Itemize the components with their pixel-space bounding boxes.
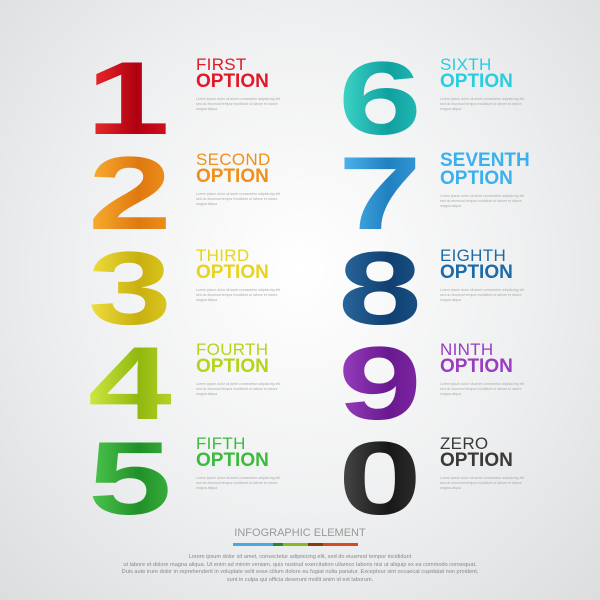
footer paragraph: sunt in culpa qui officia deserunt mollit anim id est laborum.	[227, 576, 373, 582]
digit 4: 4	[88, 326, 172, 442]
text: second option	[196, 150, 280, 206]
text: ninth option	[440, 340, 524, 396]
text: second option: OPTION	[196, 166, 269, 187]
text: seventh option: Lorem ipsum dolor sit amet consectetur adipisicing elit sed do eiusmod tempor incididunt ut labore et dolore magna aliqua	[440, 194, 524, 208]
text: first option: OPTION	[196, 71, 269, 92]
text: eighth option: Lorem ipsum dolor sit amet consectetur adipisicing elit sed do eiusmod tempor incididunt ut labore et dolore magna aliqua	[440, 288, 524, 302]
text: fourth option: OPTION	[196, 356, 269, 377]
text: fifth option: Lorem ipsum dolor sit amet consectetur adipisicing elit sed do eiusmod tempor incididunt ut labore et dolore magna aliqua	[196, 476, 280, 490]
text: fourth option: FOURTH	[196, 340, 268, 359]
digit 6: 6	[338, 41, 422, 157]
text: third option: OPTION	[196, 262, 269, 283]
footer paragraph	[122, 554, 478, 582]
text: seventh option: OPTION	[440, 168, 513, 189]
digit 8: 8	[338, 231, 422, 347]
text: second option: SECOND	[196, 150, 271, 169]
text: second option: Lorem ipsum dolor sit amet consectetur adipisicing elit sed do eiusmod tempor incididunt ut labore et dolore magna aliqua	[196, 192, 280, 206]
text: fifth option	[196, 434, 280, 490]
text: seventh option: SEVENTH	[440, 150, 530, 171]
text: first option: Lorem ipsum dolor sit amet consectetur adipisicing elit sed do eiusmod tempor incididunt ut labore et dolore magna aliqua	[196, 97, 280, 111]
text: fifth option: OPTION	[196, 450, 269, 471]
text: ninth option: NINTH	[440, 340, 493, 359]
text: seventh option	[440, 150, 530, 208]
text: first option: FIRST	[196, 55, 247, 74]
text: zero option: Lorem ipsum dolor sit amet consectetur adipisicing elit sed do eiusmod tempor incididunt ut labore et dolore magna aliqua	[440, 476, 524, 490]
text: sixth option	[440, 55, 524, 111]
footer paragraph: ut labore et dolore magna aliqua. Ut enim ad minim veniam, quis nostrud exercitation ullamco laboris nisi ut aliquip ex ea commodo consequat.	[123, 562, 477, 568]
text: ninth option: Lorem ipsum dolor sit amet consectetur adipisicing elit sed do eiusmod tempor incididunt ut labore et dolore magna aliqua	[440, 382, 524, 396]
text: eighth option: OPTION	[440, 262, 513, 283]
text: sixth option: SIXTH	[440, 55, 492, 74]
footer paragraph: Duis aute irure dolor in reprehenderit in voluptate velit esse cillum dolore eu fugiat nulla pariatur. Excepteur sint occaecat cupidatat non proident,	[122, 569, 478, 575]
text: fourth option: Lorem ipsum dolor sit amet consectetur adipisicing elit sed do eiusmod tempor incididunt ut labore et dolore magna aliqua	[196, 382, 280, 396]
digit 0: 0	[338, 421, 422, 537]
text: fourth option	[196, 340, 280, 396]
digit 3: 3	[88, 231, 172, 347]
text: ninth option: OPTION	[440, 356, 513, 377]
text: third option	[196, 246, 280, 302]
text: third option: THIRD	[196, 246, 249, 265]
text: eighth option	[440, 246, 524, 302]
text: third option: Lorem ipsum dolor sit amet consectetur adipisicing elit sed do eiusmod tempor incididunt ut labore et dolore magna aliqua	[196, 288, 280, 302]
text: zero option: OPTION	[440, 450, 513, 471]
digit 1: 1	[86, 41, 170, 157]
footer paragraph: Lorem ipsum dolor sit amet, consectetur adipisicing elit, sed do eiusmod tempor incididunt	[189, 554, 411, 560]
digit 7: 7	[338, 136, 422, 252]
text: sixth option: OPTION	[440, 71, 513, 92]
text: zero option	[440, 434, 524, 490]
text: zero option: ZERO	[440, 434, 488, 453]
footer color bar	[233, 543, 358, 546]
text: fifth option: FIFTH	[196, 434, 246, 453]
text: sixth option: Lorem ipsum dolor sit amet consectetur adipisicing elit sed do eiusmod tempor incididunt ut labore et dolore magna aliqua	[440, 97, 524, 111]
digit 9: 9	[338, 326, 422, 442]
text: eighth option: EIGHTH	[440, 246, 506, 265]
text: first option	[196, 55, 280, 111]
footer title: INFOGRAPHIC ELEMENT	[234, 527, 366, 539]
digit 5: 5	[88, 421, 172, 537]
digit 2: 2	[88, 136, 172, 252]
